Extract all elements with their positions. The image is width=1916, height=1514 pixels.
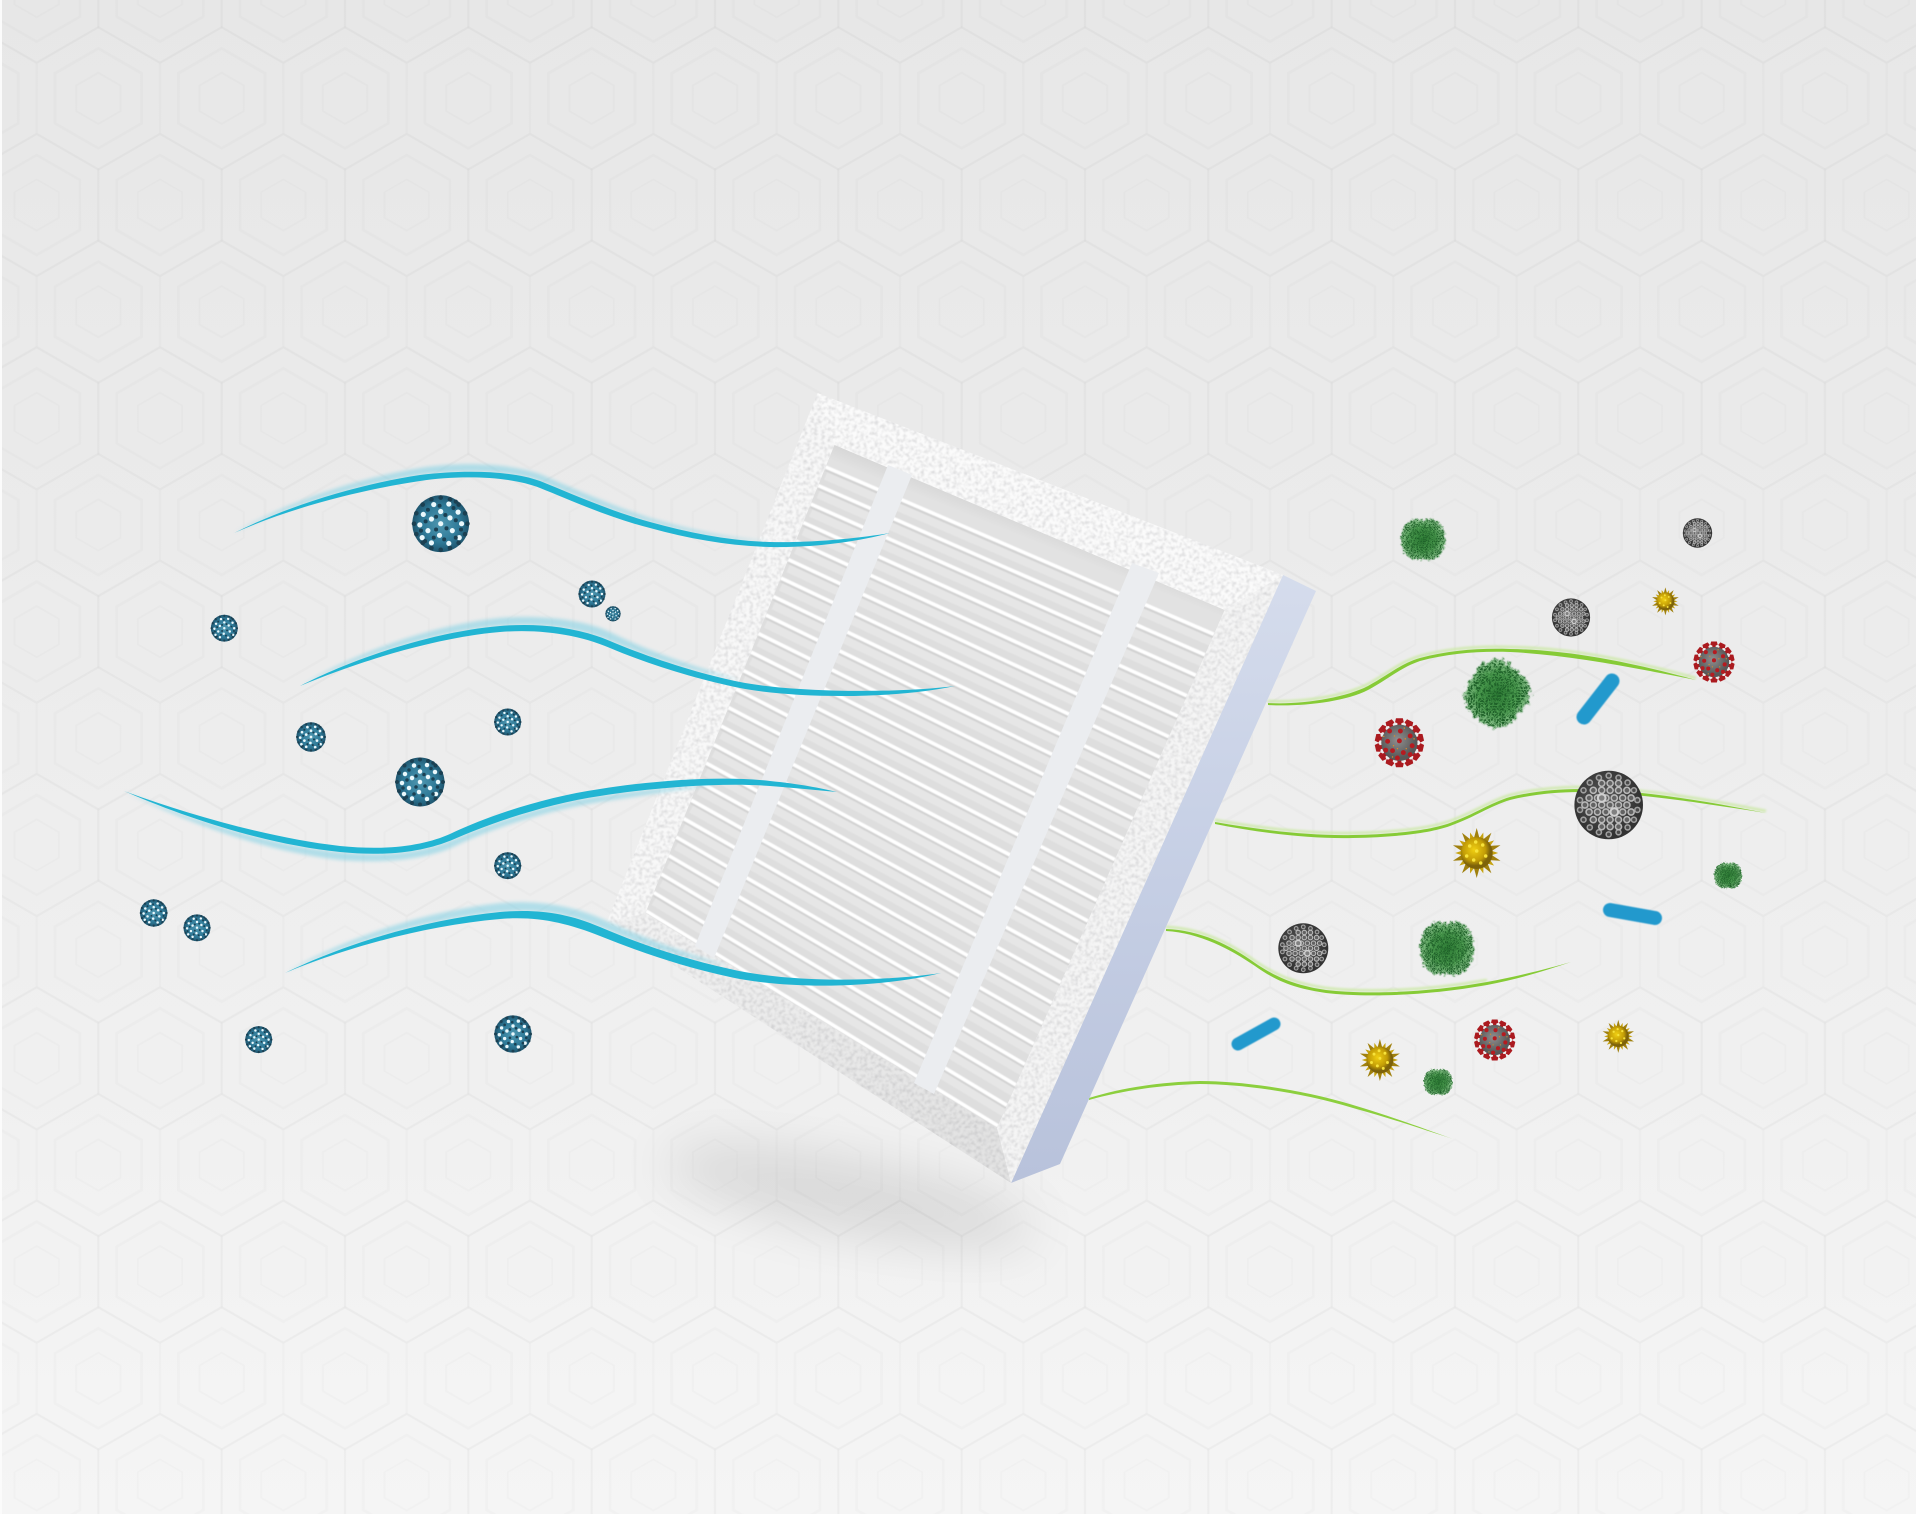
- yellow spore lower right: [1602, 1020, 1635, 1053]
- filter pleated media: [645, 445, 1225, 1135]
- particle 12: [494, 1015, 532, 1053]
- green stream 4: [1089, 1081, 1453, 1139]
- blue stream 3: [124, 779, 837, 861]
- filter drop shadow: [657, 1126, 1043, 1266]
- particle 6: [494, 709, 521, 735]
- yellow spore small: [1652, 587, 1679, 615]
- green stream 3: [1166, 927, 1571, 995]
- yellow spore: [1452, 828, 1501, 878]
- air filter: [607, 393, 1316, 1183]
- particle 4: [605, 606, 621, 621]
- particle 5: [296, 722, 326, 752]
- filter foam frame: [607, 393, 1283, 1183]
- grey pollen medium: [1552, 598, 1590, 637]
- mould clump 1: [1401, 519, 1445, 560]
- blue bacterium 1: [1584, 681, 1612, 717]
- small mould clump bottom: [1424, 1069, 1452, 1095]
- green stream 1: [1268, 647, 1696, 705]
- yellow spore lower left: [1359, 1039, 1401, 1081]
- blue stream 2: [300, 617, 955, 696]
- big mould clump: [1465, 660, 1530, 727]
- virus top right: [1693, 642, 1735, 682]
- blue stream 1: [234, 464, 890, 547]
- particle 9: [140, 899, 167, 927]
- particle 8: [494, 852, 521, 879]
- particle 1: [412, 495, 469, 552]
- particle 2: [211, 615, 238, 642]
- grey pollen lower: [1278, 923, 1328, 973]
- virus lower: [1474, 1020, 1516, 1060]
- filter right separator: [914, 563, 1159, 1094]
- particle 3: [579, 581, 605, 607]
- particle 7: [396, 758, 444, 806]
- particle 10: [184, 914, 210, 941]
- blue stream 4: [285, 902, 941, 986]
- captured contaminants (right): [1238, 518, 1742, 1095]
- green clean air streams: [1089, 647, 1766, 1139]
- grey pollen small: [1683, 518, 1712, 548]
- virus left: [1375, 718, 1424, 767]
- particle 11: [245, 1026, 272, 1053]
- filter left separator: [695, 465, 912, 958]
- small mould clump right: [1714, 863, 1742, 888]
- green stream 2: [1215, 787, 1766, 838]
- big grey pollen: [1574, 771, 1643, 839]
- dirty air particles (left): [140, 495, 621, 1053]
- blue air streams: [124, 464, 955, 986]
- mould clump lower: [1420, 922, 1474, 975]
- blue bacterium 2: [1610, 910, 1655, 918]
- blue bacterium 3: [1238, 1024, 1274, 1044]
- filter side face: [1011, 575, 1316, 1183]
